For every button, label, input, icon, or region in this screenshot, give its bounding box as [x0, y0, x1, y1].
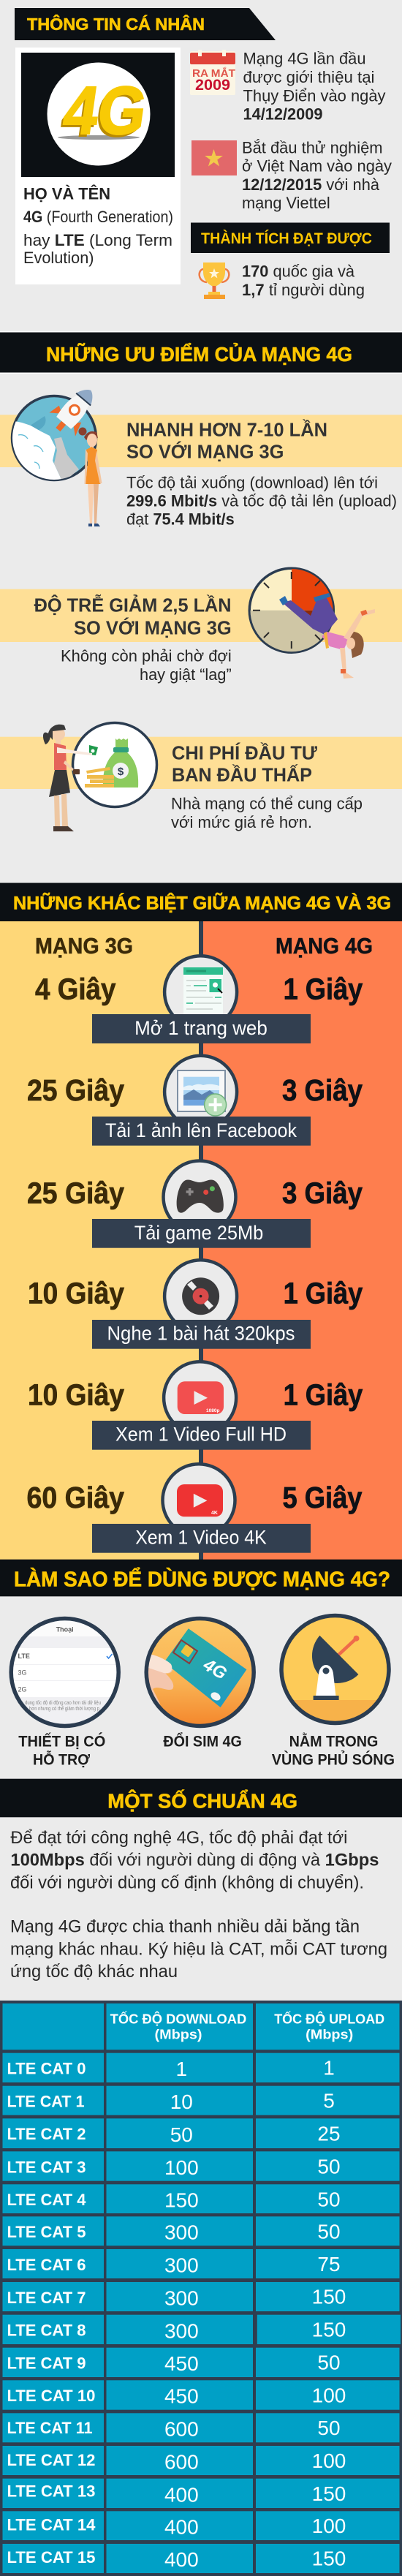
row: LTE CAT 3: 100: [164, 2156, 199, 2179]
row: LTE CAT 3: LTE CAT 3: [7, 2158, 86, 2176]
row: LTE CAT 14: [3, 2511, 399, 2540]
row: upload photo: [27, 1056, 363, 1146]
row: LTE CAT 2: [3, 2118, 399, 2148]
row: LTE CAT 5: LTE CAT 5: [7, 2223, 86, 2241]
row: LTE CAT 2: LTE CAT 2: [7, 2125, 86, 2143]
row: listen to a song: [28, 1260, 363, 1349]
label: upload photo: Tải 1 ảnh lên Facebook: [105, 1119, 297, 1141]
row: LTE CAT 12: [3, 2446, 399, 2475]
icon: full HD play button: 1080p: [206, 1408, 219, 1413]
row: full HD video: [28, 1361, 363, 1450]
text: latency details: Không còn phải chờ đợi: [61, 647, 232, 665]
text: achievement figures: [242, 262, 365, 299]
row: full HD video: 1 Giây: [284, 1378, 363, 1412]
icon: launch calendar: [190, 50, 235, 95]
icon: phone settings circle: dung tốc độ di động cao hơn tải dữ liệu: [25, 1699, 101, 1706]
row: LTE CAT 8: LTE CAT 8: [7, 2322, 86, 2340]
text: achievement figures: 170 quốc gia và: [242, 262, 355, 280]
label: download game: Tải game 25Mb: [134, 1222, 263, 1244]
name text: 4G (Fourth Generation): [23, 208, 173, 226]
row: LTE CAT 12: 100: [312, 2450, 346, 2472]
column backgrounds: [0, 921, 402, 1560]
icon: phone settings circle: LTE: [18, 1653, 30, 1660]
row: LTE CAT 3: 50: [317, 2155, 341, 2177]
row: LTE CAT 15: [3, 2544, 399, 2573]
icon: phone settings circle: hơn nhưng có thể giảm thời lượng p: [29, 1706, 99, 1712]
text: Vietnam trial: 12/12/2015 với nhà: [242, 175, 380, 194]
heading: advantages: [0, 331, 402, 374]
row: LTE CAT 14: LTE CAT 14: [7, 2516, 96, 2534]
label: supported device: THIẾT BỊ CÓ: [18, 1733, 105, 1750]
text: standards paragraph one: [10, 1828, 379, 1892]
text: standards paragraph two: Mạng 4G được chia thanh nhiều dải băng tần: [10, 1917, 360, 1937]
row: LTE CAT 4: LTE CAT 4: [7, 2191, 86, 2209]
row: LTE CAT 5: 300: [164, 2221, 199, 2244]
row: LTE CAT 5: [3, 2216, 399, 2245]
row: 4K video: 5 Giây: [282, 1481, 363, 1514]
row: LTE CAT 1: 5: [323, 2089, 335, 2112]
panel: 4G standards: [0, 1779, 402, 2576]
row: LTE CAT 7: LTE CAT 7: [7, 2289, 86, 2307]
table header: TỐC ĐỘ DOWNLOAD: [110, 2012, 246, 2027]
text: faster heading: SO VỚI MẠNG 3G: [126, 441, 284, 463]
row: open web page: 4 Giây: [35, 972, 116, 1006]
4G logo: 4G: [56, 75, 149, 152]
row: LTE CAT 1: [3, 2086, 399, 2115]
icon: 4K play button: 4K: [211, 1511, 218, 1516]
text: launch date: 14/12/2009: [243, 105, 323, 123]
heading: achievements: [191, 222, 390, 253]
advantage: lower latency: [0, 568, 402, 684]
row: LTE CAT 4: 150: [164, 2189, 199, 2212]
row: download game: [27, 1161, 363, 1248]
heading: how to use: [0, 1560, 402, 1596]
text: standards paragraph two: ứng tốc độ khác nhau: [10, 1962, 178, 1982]
name text: [23, 185, 173, 267]
text: standards paragraph two: mạng khác nhau. Ký hiệu là CAT, mỗi CAT tương: [10, 1939, 387, 1959]
icon: trophy: [200, 262, 229, 299]
row: LTE CAT 10: 450: [164, 2385, 199, 2408]
row: LTE CAT 1: 10: [170, 2090, 193, 2113]
icon: 4K play button: [177, 1484, 223, 1516]
row: LTE CAT 7: 300: [164, 2286, 199, 2309]
text: Vietnam trial: ở Việt Nam vào ngày: [242, 157, 392, 175]
text: cost details: Nhà mạng có thể cung cấp: [171, 795, 363, 813]
row: LTE CAT 3: [3, 2151, 399, 2181]
table header: (Mbps): [306, 2027, 353, 2041]
text: faster details: Tốc độ tải xuống (download) lên tới: [126, 473, 378, 491]
row: LTE CAT 12: 600: [164, 2451, 199, 2474]
label: download game: [92, 1219, 311, 1248]
row: LTE CAT 14: 400: [164, 2515, 199, 2538]
label: full HD video: Xem 1 Video Full HD: [115, 1424, 287, 1446]
icon: Vietnam flag: [191, 140, 237, 175]
label: open web page: Mở 1 trang web: [134, 1017, 268, 1039]
text: faster heading: NHANH HƠN 7-10 LẦN: [126, 419, 327, 441]
name text: Evolution): [23, 249, 94, 267]
text: latency heading: [34, 594, 232, 638]
row: LTE CAT 0: LTE CAT 0: [7, 2060, 86, 2078]
row: LTE CAT 9: [3, 2348, 399, 2377]
text: latency details: [61, 647, 232, 684]
table header: TỐC ĐỘ UPLOAD: [274, 2012, 384, 2027]
text: faster details: 299.6 Mbit/s và tốc độ tải lên (upload): [126, 491, 397, 510]
column title: 3G: MẠNG 3G: [35, 933, 133, 959]
icon: launch calendar: RA MẮT: [192, 67, 235, 80]
heading: personal information: THÔNG TIN CÁ NHÂN: [27, 14, 205, 34]
illustration: rocket and woman: [10, 390, 102, 526]
heading: standards: [0, 1779, 402, 1817]
text: cost details: [171, 795, 363, 831]
icon: photo upload: [178, 1070, 227, 1116]
row: LTE CAT 2: 25: [317, 2122, 341, 2145]
row: LTE CAT 0: 1: [323, 2056, 335, 2079]
heading: advantages: NHỮNG ƯU ĐIỂM CỦA MẠNG 4G: [46, 342, 352, 366]
text: launch date: được giới thiệu tại: [243, 68, 374, 86]
row: LTE CAT 9: 50: [317, 2351, 341, 2373]
row: LTE CAT 15: 400: [164, 2548, 199, 2571]
text: latency heading: SO VỚI MẠNG 3G: [74, 616, 232, 638]
icon: vinyl record: [182, 1277, 219, 1315]
row: LTE CAT 8: 150: [312, 2319, 346, 2341]
row: download game: 25 Giây: [27, 1176, 124, 1210]
text: Vietnam trial: mạng Viettel: [242, 194, 330, 212]
row: LTE CAT 13: 400: [164, 2484, 199, 2507]
row: upload photo: 25 Giây: [27, 1073, 124, 1107]
row: LTE CAT 8: [3, 2315, 401, 2344]
heading: comparison: NHỮNG KHÁC BIỆT GIỮA MẠNG 4G VÀ 3G: [13, 891, 391, 913]
row: LTE CAT 11: [3, 2413, 399, 2442]
label: supported device: [18, 1733, 105, 1768]
row: LTE CAT 7: [3, 2282, 399, 2311]
panel: 3G versus 4G comparison: [0, 882, 402, 1560]
row: listen to a song: 10 Giây: [28, 1277, 124, 1310]
text: cost heading: CHI PHÍ ĐẦU TƯ: [172, 741, 317, 763]
row: LTE CAT 14: 100: [312, 2515, 346, 2537]
text: faster heading: [126, 419, 327, 463]
row: LTE CAT 13: [3, 2479, 399, 2508]
row: LTE CAT 13: LTE CAT 13: [7, 2482, 95, 2500]
label: supported device: HỖ TRỢ: [33, 1750, 90, 1768]
row: LTE CAT 11: LTE CAT 11: [7, 2419, 92, 2437]
row: LTE CAT 10: 100: [312, 2384, 346, 2406]
row: LTE CAT 5: 50: [317, 2220, 341, 2243]
row: LTE CAT 4: [3, 2184, 399, 2213]
icon: web page: [183, 967, 223, 1015]
panel: how to use 4G: [0, 1560, 402, 1768]
label: open web page: [92, 1014, 311, 1043]
icon: launch calendar: 2009: [195, 77, 230, 94]
table: LTE categories: [0, 2001, 402, 2576]
table header: (Mbps): [155, 2027, 202, 2041]
panel: personal information: [15, 8, 392, 299]
text: launch date: Thụy Điển vào ngày: [243, 86, 386, 105]
text: cost heading: BAN ĐẦU THẤP: [172, 764, 312, 786]
label: coverage area: NẰM TRONG: [289, 1733, 378, 1750]
heading: personal information: [15, 8, 276, 40]
text: standards paragraph one: 100Mbps đối với người dùng di động và 1Gbps: [10, 1851, 379, 1870]
heading: achievements: THÀNH TÍCH ĐẠT ĐƯỢC: [201, 230, 372, 247]
4G logo: 4G: [59, 72, 151, 148]
label: 4K video: Xem 1 Video 4K: [135, 1527, 267, 1549]
row: LTE CAT 6: LTE CAT 6: [7, 2256, 86, 2274]
profile card: [15, 48, 181, 284]
row: LTE CAT 6: 300: [164, 2254, 199, 2277]
heading: standards: MỘT SỐ CHUẨN 4G: [107, 1789, 297, 1813]
label: 4K video: [92, 1524, 311, 1553]
text: Vietnam trial: [242, 138, 392, 212]
row: LTE CAT 12: LTE CAT 12: [7, 2451, 95, 2469]
row: open web page: [35, 956, 363, 1043]
row: LTE CAT 0: 1: [176, 2058, 187, 2080]
name text: HỌ VÀ TÊN: [23, 185, 110, 203]
illustration: clock and handstand: [249, 568, 375, 679]
label: listen to a song: [92, 1320, 311, 1349]
label: coverage area: VÙNG PHỦ SÓNG: [272, 1750, 395, 1768]
row: download game: 3 Giây: [282, 1176, 363, 1210]
illustration: woman and money bag: $: [118, 766, 124, 778]
icon: 4G SIM card circle: 4G: [200, 1655, 230, 1684]
text: latency heading: ĐỘ TRỄ GIẢM 2,5 LẦN: [34, 594, 232, 616]
heading: how to use: LÀM SAO ĐỂ DÙNG ĐƯỢC MẠNG 4G?: [14, 1566, 390, 1591]
illustration: woman and money bag: [43, 722, 156, 831]
row: LTE CAT 6: 75: [317, 2253, 341, 2275]
column title: 4G: MẠNG 4G: [276, 933, 373, 959]
label: full HD video: [92, 1421, 311, 1450]
row: LTE CAT 0: [3, 2053, 399, 2082]
advantage: faster: [0, 379, 402, 528]
text: cost heading: [172, 741, 317, 786]
row: LTE CAT 13: 150: [312, 2482, 346, 2505]
row: LTE CAT 10: [3, 2380, 399, 2410]
icon: 4G SIM card circle: [146, 1619, 254, 1726]
label: listen to a song: Nghe 1 bài hát 320kps: [107, 1323, 295, 1345]
text: faster details: [126, 473, 397, 528]
row: LTE CAT 1: LTE CAT 1: [7, 2093, 85, 2111]
row: LTE CAT 4: 50: [317, 2188, 341, 2210]
row: LTE CAT 11: 50: [317, 2417, 341, 2439]
text: launch date: Mạng 4G lần đầu: [243, 50, 365, 68]
text: latency details: hay giật “lag”: [140, 665, 232, 684]
text: faster details: đạt 75.4 Mbit/s: [126, 510, 235, 528]
row: LTE CAT 11: 600: [164, 2418, 199, 2441]
icon: phone settings circle: Thoại: [56, 1626, 74, 1633]
row: full HD video: 10 Giây: [28, 1378, 124, 1412]
icon: gamepad: [177, 1180, 224, 1213]
text: standards paragraph one: Để đạt tới công nghệ 4G, tốc độ phải đạt tới: [10, 1828, 347, 1848]
text: standards paragraph two: [10, 1917, 387, 1982]
heading: comparison: [0, 882, 402, 921]
name text: hay LTE (Long Term: [23, 231, 172, 249]
row: 4K video: 60 Giây: [26, 1481, 124, 1514]
icon: phone settings circle: 3G: [18, 1669, 27, 1677]
label: change SIM: ĐỔI SIM 4G: [163, 1733, 242, 1750]
row: LTE CAT 8: 300: [164, 2319, 199, 2342]
label: coverage area: [272, 1733, 395, 1768]
row: LTE CAT 10: LTE CAT 10: [7, 2387, 95, 2405]
row: upload photo: 3 Giây: [282, 1073, 363, 1107]
text: standards paragraph one: đối với người dùng cố định (không di chuyển).: [10, 1873, 364, 1892]
row: LTE CAT 15: LTE CAT 15: [7, 2548, 95, 2566]
text: achievement figures: 1,7 tỉ người dùng: [242, 281, 365, 299]
panel: advantages of 4G: [0, 331, 402, 831]
row: LTE CAT 6: [3, 2249, 399, 2278]
text: Vietnam trial: Bắt đầu thử nghiệm: [242, 138, 383, 156]
icon: phone settings circle: 2G: [18, 1685, 27, 1693]
row: open web page: 1 Giây: [284, 972, 363, 1006]
4G logo: [21, 53, 175, 177]
icon: full HD play button: [178, 1381, 224, 1414]
text: cost details: với mức giá rẻ hơn.: [171, 813, 312, 831]
row: LTE CAT 2: 50: [170, 2123, 193, 2146]
row: LTE CAT 9: 450: [164, 2352, 199, 2375]
row: listen to a song: 1 Giây: [284, 1277, 363, 1310]
advantage: low cost: [0, 722, 402, 831]
row: LTE CAT 15: 150: [312, 2547, 346, 2569]
table header: [3, 2003, 399, 2050]
text: launch date: [243, 50, 386, 123]
row: 4K video: [26, 1464, 363, 1553]
row: LTE CAT 9: LTE CAT 9: [7, 2354, 86, 2372]
icon: phone settings circle: [7, 1619, 124, 1726]
row: LTE CAT 7: 150: [312, 2286, 346, 2308]
icon: coverage dish circle: [278, 1616, 395, 1729]
